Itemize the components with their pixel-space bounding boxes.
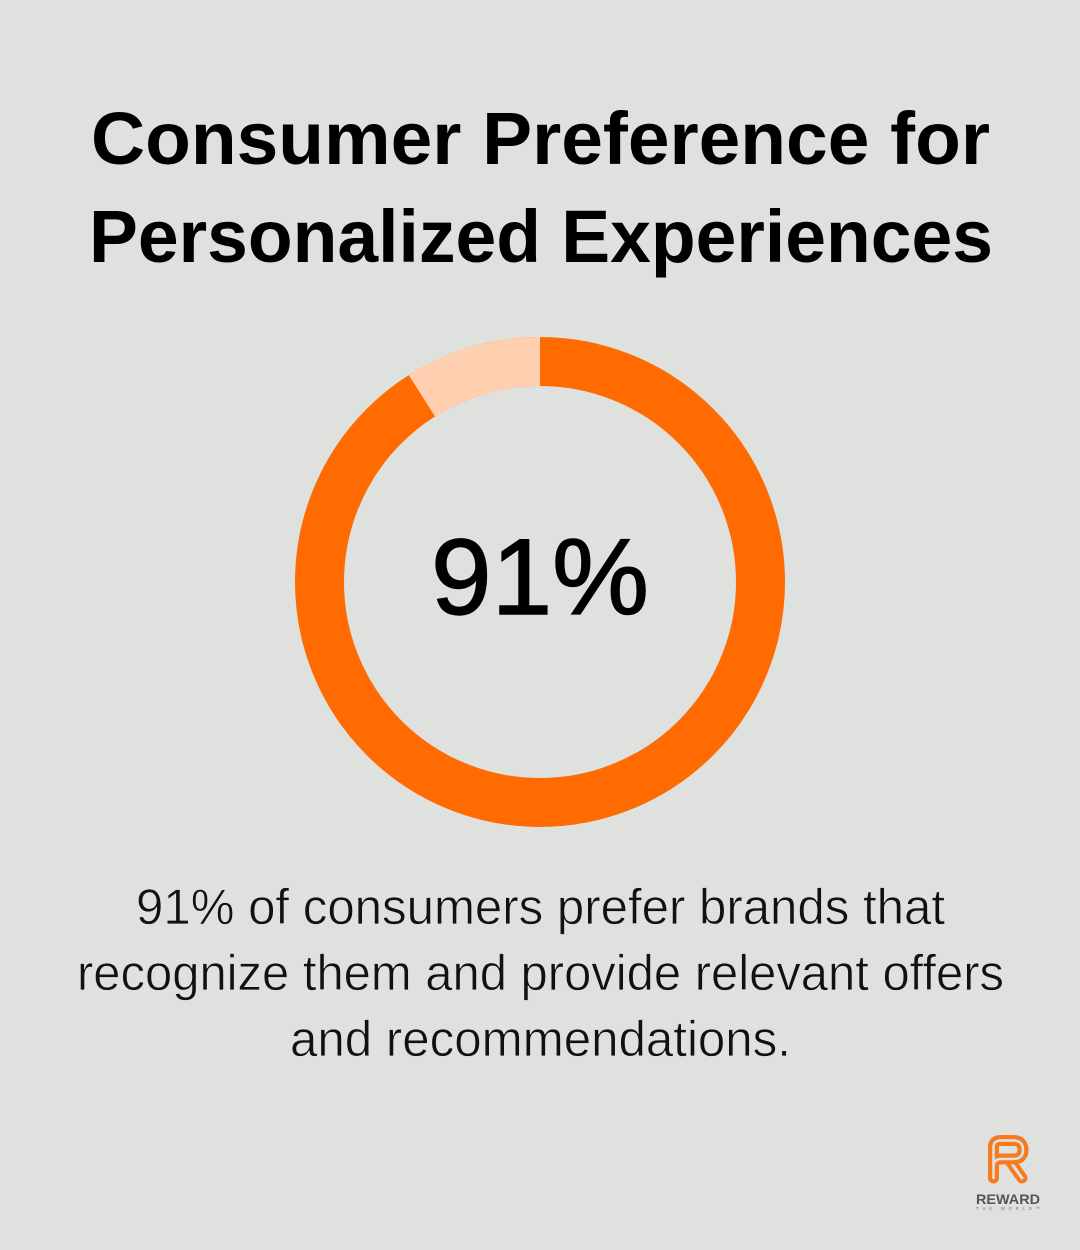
title [89, 97, 993, 278]
description text: 91% of consumers prefer brands that [136, 879, 945, 935]
description text [77, 879, 1004, 1067]
logo tagline: THE WORLD™ [976, 1206, 1040, 1211]
title: Personalized Experiences [89, 195, 993, 278]
logo wordmark: REWARD [976, 1191, 1040, 1207]
donut value: 91% [431, 516, 649, 637]
description text: recognize them and provide relevant offers [77, 945, 1004, 1001]
logo icon: R mark [994, 1140, 1023, 1178]
description text: and recommendations. [290, 1011, 791, 1067]
donut chart: 91% [320, 362, 760, 802]
logo: Reward the World [976, 1140, 1040, 1211]
title: Consumer Preference for [91, 97, 990, 180]
